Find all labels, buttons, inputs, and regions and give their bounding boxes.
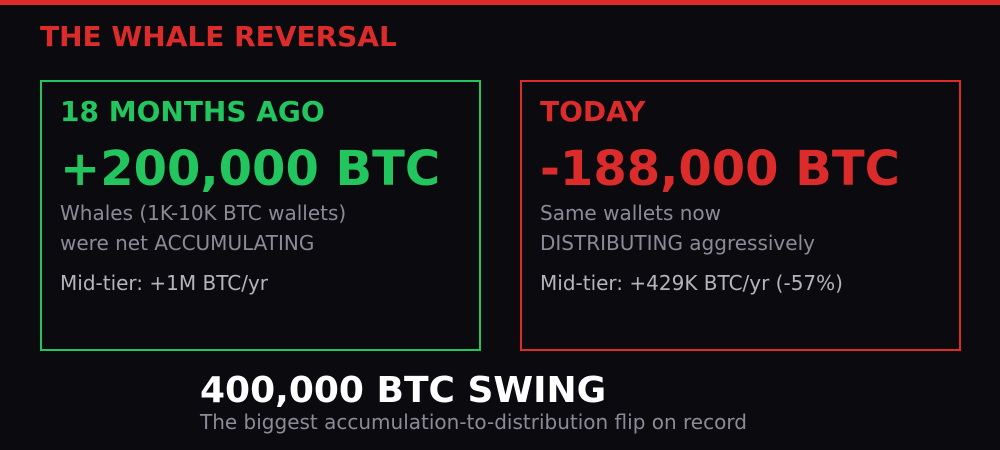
description: Same wallets now [540, 201, 721, 225]
panel: 18 months ago [40, 80, 481, 351]
description [60, 201, 346, 255]
panel: today [520, 80, 961, 351]
swing subtitle: The biggest accumulation-to-distribution flip on record [200, 410, 747, 434]
mid-tier stat: Mid-tier: +1M BTC/yr [60, 271, 268, 295]
swing headline: 400,000 BTC SWING [200, 370, 606, 411]
big number: +200,000 BTC: +200,000 BTC [60, 141, 440, 197]
mid-tier stat: Mid-tier: +429K BTC/yr (-57%) [540, 271, 843, 295]
heading: today: TODAY [540, 95, 645, 128]
description: DISTRIBUTING aggressively [540, 231, 815, 255]
description: were net ACCUMULATING [60, 231, 314, 255]
description: Whales (1K-10K BTC wallets) [60, 201, 346, 225]
heading: 18 months ago: 18 MONTHS AGO [60, 95, 325, 128]
title: THE WHALE REVERSAL [40, 20, 397, 53]
description [540, 201, 815, 255]
big number: -188,000 BTC: -188,000 BTC [540, 141, 900, 197]
top accent bar [0, 0, 1000, 5]
